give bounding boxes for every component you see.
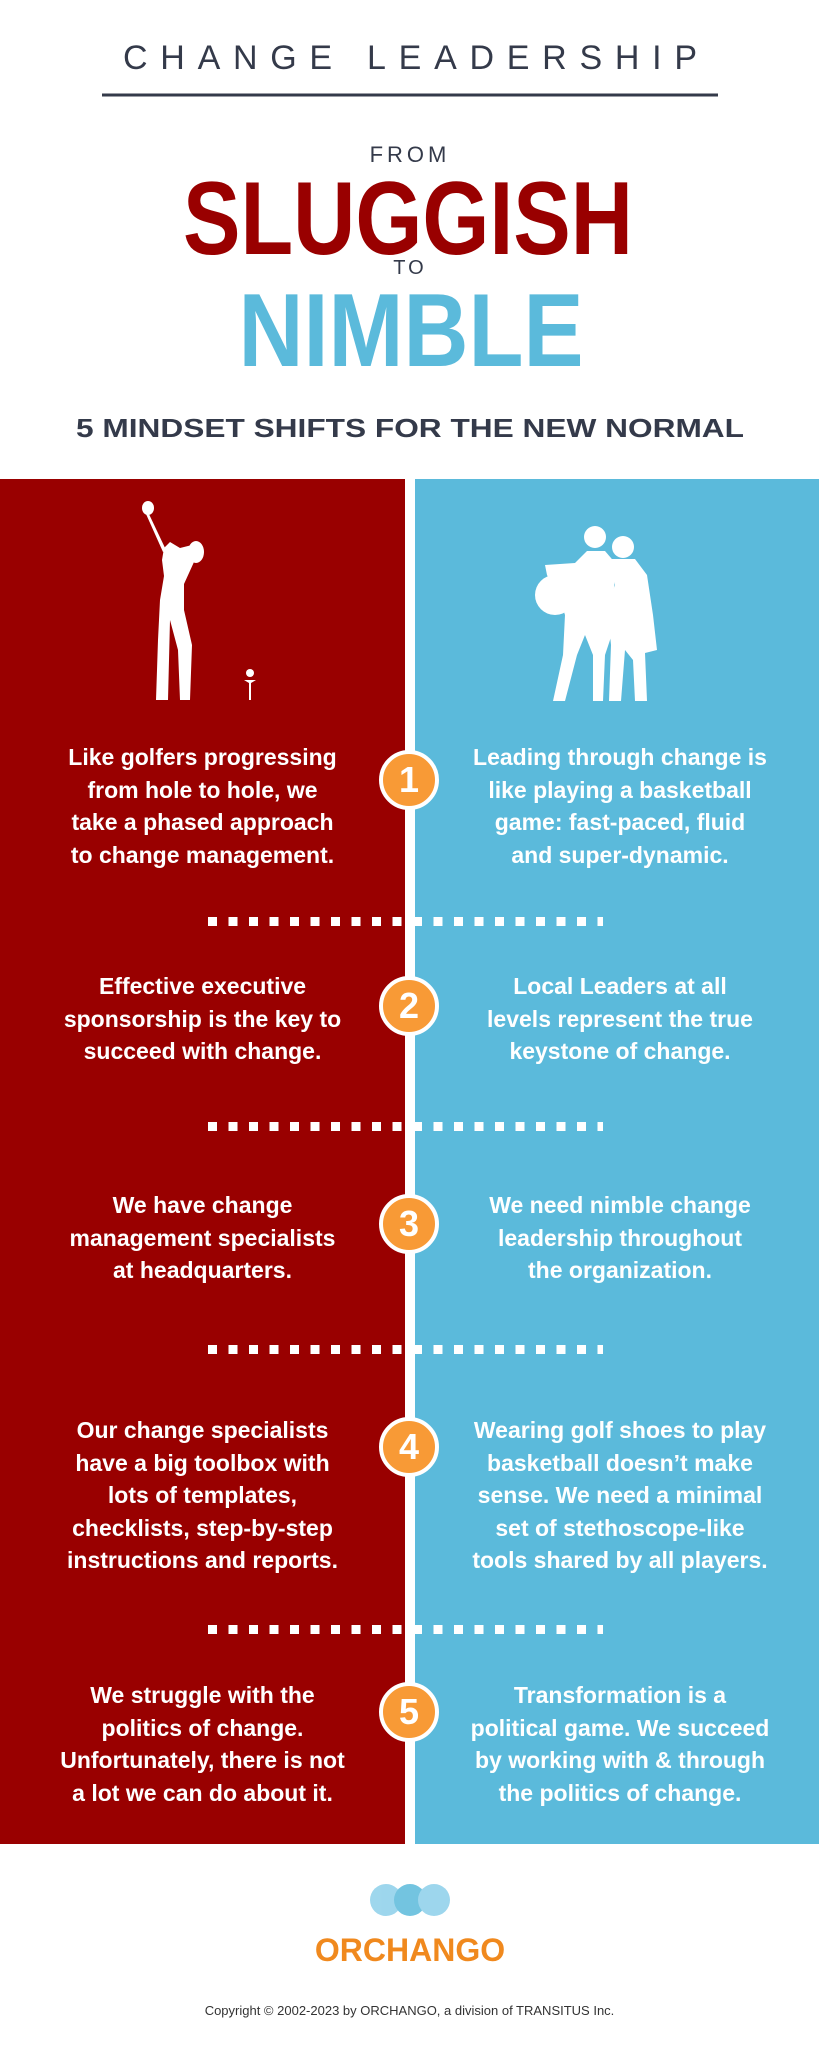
text: the organization. [528, 1257, 712, 1283]
text: the politics of change. [499, 1780, 741, 1806]
row 4: Our change specialists [77, 1417, 328, 1443]
text: Wearing golf shoes to play [474, 1417, 766, 1443]
row 3: at headquarters. [113, 1257, 292, 1283]
row 4 [67, 1417, 338, 1573]
text: by working with & through [475, 1747, 765, 1773]
row 3: We have change [113, 1192, 292, 1218]
title: change leadership: CHANGE LEADERSHIP [123, 39, 697, 77]
row 1: Like golfers progressing [68, 744, 337, 770]
text: like playing a basketball [488, 776, 752, 802]
row 5: Unfortunately, there is not [60, 1747, 345, 1773]
row 1: from hole to hole, we [87, 776, 318, 802]
text: We need nimble change [489, 1192, 751, 1218]
header [76, 39, 744, 443]
text: sense. We need a minimal [478, 1482, 762, 1508]
row 1 [68, 744, 337, 868]
text: and super-dynamic. [511, 842, 729, 868]
text: 3 [399, 1203, 419, 1244]
to: TO [393, 257, 427, 279]
logo [315, 1884, 505, 1968]
row 4: instructions and reports. [67, 1547, 338, 1573]
text: basketball doesn’t make [487, 1450, 753, 1476]
text: Leading through change is [473, 744, 767, 770]
row 3: management specialists [70, 1224, 335, 1250]
row 2 [64, 973, 341, 1064]
panel: nimble [415, 479, 819, 1844]
text: game: fast-paced, fluid [495, 809, 745, 835]
row 4: have a big toolbox with [75, 1450, 330, 1476]
text: levels represent the true [487, 1006, 753, 1032]
subtitle: 5 MINDSET SHIFTS FOR THE NEW NORMAL [76, 413, 744, 443]
icon: basketball players [535, 526, 657, 701]
row 2: succeed with change. [84, 1038, 321, 1064]
row 4: checklists, step-by-step [72, 1514, 333, 1540]
text: 5 [399, 1691, 419, 1732]
text: 2 [399, 985, 419, 1026]
row 5: a lot we can do about it. [72, 1780, 333, 1806]
from: FROM [370, 142, 450, 167]
row 3 [70, 1192, 335, 1283]
text: set of stethoscope-like [495, 1514, 745, 1540]
text: political game. We succeed [471, 1714, 769, 1740]
text: Transformation is a [514, 1682, 726, 1708]
row 2: sponsorship is the key to [64, 1006, 341, 1032]
text: 4 [399, 1426, 419, 1467]
text: Local Leaders at all [513, 973, 727, 999]
row 4: lots of templates, [108, 1482, 297, 1508]
text: tools shared by all players. [472, 1547, 768, 1573]
nimble: NIMBLE [238, 273, 584, 389]
panel: sluggish [0, 479, 405, 1844]
logo: ORCHANGO [315, 1932, 505, 1968]
text: leadership throughout [498, 1224, 742, 1250]
row 2: Effective executive [99, 973, 306, 999]
text: keystone of change. [509, 1038, 731, 1064]
icon: golfer [142, 501, 256, 700]
copyright: Copyright © 2002-2023 by ORCHANGO, a division of TRANSITUS Inc. [205, 2003, 614, 2018]
row 1: take a phased approach [71, 809, 334, 835]
text: 1 [399, 759, 419, 800]
row 5 [60, 1682, 345, 1806]
row 5: politics of change. [102, 1714, 303, 1740]
sluggish: SLUGGISH [183, 161, 633, 277]
row 1: to change management. [71, 842, 334, 868]
row 5: We struggle with the [90, 1682, 315, 1708]
